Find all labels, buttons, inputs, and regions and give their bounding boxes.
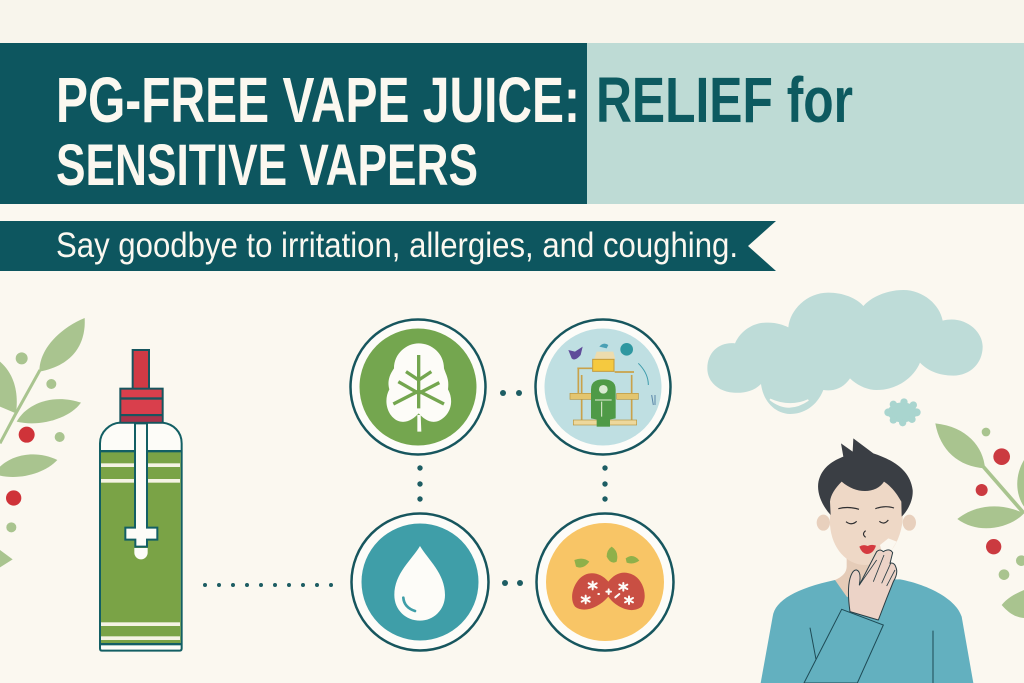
icon: vapor cloud (707, 290, 983, 426)
small puff (884, 398, 921, 426)
face details (838, 507, 894, 537)
subtitle ribbon (0, 221, 776, 271)
title text: RELIEF for (596, 64, 853, 136)
sleeve (804, 609, 883, 683)
connector dots: bottle to drop (203, 583, 333, 587)
title banner (0, 43, 1024, 204)
icon: water drop circle (352, 514, 488, 650)
right foliage (935, 423, 1024, 618)
left foliage (0, 318, 85, 567)
subtitle ribbon: Say goodbye to irritation, allergies, and coughing. (56, 226, 738, 265)
title text: PG-FREE VAPE JUICE: (56, 64, 580, 136)
icon: device circle (536, 320, 670, 454)
connector dots between circles (417, 390, 608, 586)
hair (818, 438, 913, 517)
icon: dropper bottle (100, 350, 182, 651)
red cap (133, 350, 149, 389)
ears (817, 515, 830, 531)
shirt (761, 579, 973, 683)
dropper tube (125, 423, 157, 547)
icon: allergy berries circle (536, 514, 674, 650)
hand (848, 550, 897, 620)
title text: SENSITIVE VAPERS (56, 133, 478, 198)
neck (835, 555, 887, 602)
bottle body (100, 423, 182, 651)
face (829, 477, 903, 565)
icon: leaf circle (350, 320, 486, 454)
title text (56, 64, 853, 198)
person coughing (761, 438, 973, 683)
